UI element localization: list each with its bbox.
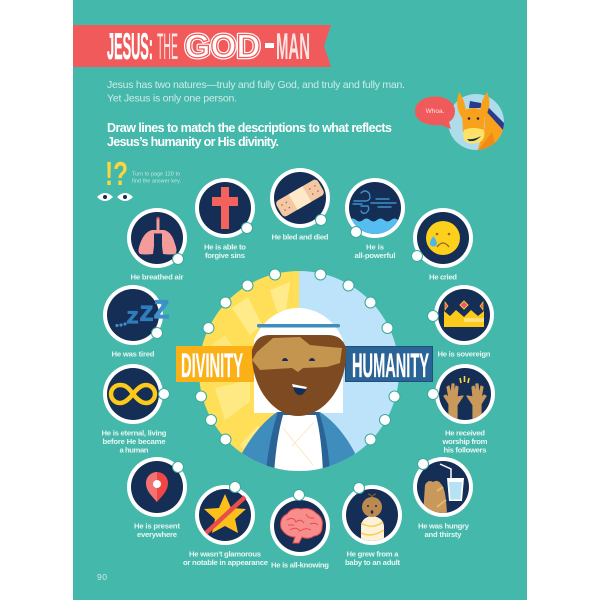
item: he is eternal: He is eternal, living [102, 428, 167, 438]
icon: wind and water [351, 190, 398, 234]
item: he received worship [428, 364, 495, 454]
page background [73, 0, 527, 600]
item: he breathed air: He breathed air [130, 272, 184, 282]
item: he received worship: worship from [442, 437, 488, 446]
item: he wasn't glamorous: He wasn’t glamorous [189, 550, 261, 558]
hint text: Turn to page 120 to [132, 172, 180, 178]
icon: sleeping z's: Z [127, 308, 138, 327]
icon: crossed-out star [204, 494, 246, 533]
item: he is able to forgive sins [195, 178, 255, 260]
item: he is able to forgive sins: forgive sins [205, 251, 245, 260]
item: he is all-powerful [345, 178, 405, 260]
icon: bandage [275, 178, 325, 218]
icon: sleeping z's: Z [140, 302, 153, 326]
icon: cross [212, 187, 238, 229]
item: he was hungry and thirsty: He was hungry [418, 522, 470, 530]
hint icon: exclamation and question marks: !? [105, 155, 128, 192]
title: GOD: GOD [184, 28, 260, 64]
item: he was hungry and thirsty [413, 457, 473, 539]
hint text [132, 172, 181, 184]
item: he grew from a baby [342, 482, 402, 567]
item: he cried: He cried [429, 272, 457, 282]
item: he bled and died: He bled and died [272, 232, 329, 242]
icon: crown [444, 301, 484, 327]
item: he bled and died [270, 168, 330, 242]
face [252, 337, 342, 372]
title: GOD: GOD [184, 28, 260, 64]
intro text: Yet Jesus is only one person. [107, 92, 237, 104]
label: divinity [176, 346, 254, 385]
icon: baby [361, 494, 384, 545]
eyes [282, 358, 315, 361]
item: he is eternal: before He became [102, 437, 166, 446]
icon: bread and water [423, 481, 447, 515]
hint text: find the answer key. [132, 178, 181, 184]
title banner: JESUS: [107, 26, 153, 67]
item: he is present everywhere: He is present [134, 522, 180, 530]
instructions: Jesus’s humanity or His divinity. [107, 135, 279, 149]
speech bubble: Whoa. [426, 108, 445, 115]
central circle [176, 269, 432, 480]
title banner: MAN [276, 26, 310, 67]
speech bubble [415, 96, 455, 129]
title banner [73, 25, 331, 67]
half circle: divinity yellow [199, 271, 399, 471]
page number: 90 [97, 572, 107, 582]
item: he is all-knowing [270, 490, 330, 570]
headdress [254, 308, 343, 413]
item: he is present everywhere: everywhere [137, 530, 178, 539]
item: he is eternal: a human [120, 446, 149, 454]
mouth [292, 384, 307, 395]
item: he is able to forgive sins: He is able to [204, 242, 246, 252]
instructions: Draw lines to match the descriptions to what reflects [107, 121, 392, 135]
item: he is all-knowing: He is all-knowing [271, 560, 329, 570]
intro text: Jesus has two natures—truly and fully God, and truly and fully man. [107, 79, 405, 91]
robe [242, 412, 355, 471]
item: he was hungry and thirsty: and thirsty [424, 530, 462, 539]
item: he cried [412, 208, 473, 282]
item: he received worship: He received [445, 428, 485, 438]
label: humanity [346, 346, 432, 385]
item: he breathed air [127, 208, 187, 282]
item: he wasn't glamorous: or notable in appearance [183, 558, 269, 567]
donkey character [448, 92, 506, 152]
ring dots [196, 269, 400, 445]
icon: sleeping z's: Z [154, 296, 169, 324]
icon: location pin [146, 472, 168, 502]
item: he received worship: his followers [444, 446, 486, 454]
icon: lungs [138, 217, 176, 254]
title banner: THE [157, 26, 178, 67]
text: HUMANITY [352, 347, 429, 385]
icon: sleeping z's [115, 296, 169, 327]
icon: eyes [97, 193, 133, 201]
item: he grew from a baby: He grew from a [346, 550, 399, 558]
icon: brain [281, 508, 322, 543]
item: he was tired: He was tired [112, 350, 155, 358]
figure of Jesus [240, 308, 355, 480]
item: he is sovereign: He is sovereign [438, 350, 491, 358]
item: he wasn't glamorous [183, 482, 269, 567]
item: he is present everywhere [127, 457, 187, 539]
hair and beard [252, 335, 346, 416]
item: he was tired [103, 285, 169, 358]
icon: raised hands [444, 376, 486, 420]
title: hyphen [265, 43, 274, 48]
instructions [107, 121, 392, 149]
icon: infinity [111, 385, 155, 403]
icon: crying face [426, 221, 460, 255]
item: he is sovereign [428, 285, 494, 358]
item: he is eternal [102, 364, 170, 454]
item: he is all-powerful: He is [366, 242, 384, 252]
label: divinity: DIVINITY [181, 347, 243, 385]
item: he grew from a baby: baby to an adult [345, 558, 400, 567]
intro text [107, 79, 405, 104]
item: he is all-powerful: all-powerful [354, 251, 396, 260]
headband [257, 324, 340, 328]
